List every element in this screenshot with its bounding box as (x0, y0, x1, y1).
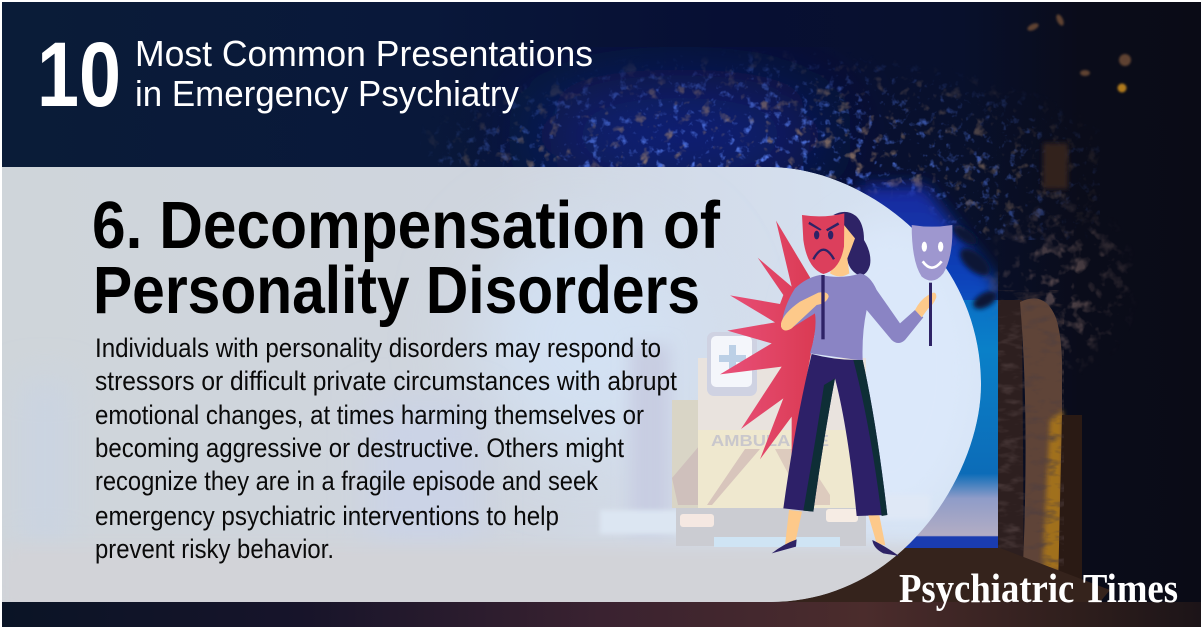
legs (785, 510, 885, 545)
body text: stressors or difficult private circumstances with abrupt (95, 366, 678, 396)
body text: recognize they are in a fragile episode and seek (95, 466, 599, 496)
body text (95, 333, 678, 564)
body text: becoming aggressive or destructive. Others might (95, 433, 625, 463)
ambulance lettering: AMBULANCE (711, 433, 829, 450)
distant leaves catching light (1026, 13, 1131, 93)
title: line one: Most Common Presentations (135, 33, 593, 74)
title: line two: in Emergency Psychiatry (135, 73, 520, 114)
title: number 10: 10 (37, 24, 121, 126)
trouser shading (803, 360, 887, 516)
heading: decompensation of personality disorders: 6. Decompensation of (92, 188, 721, 263)
mask stick: angry (821, 275, 825, 339)
icon: smiling purple mask (912, 225, 952, 281)
arm: near forearm (781, 292, 829, 330)
body text: prevent risky behavior. (95, 534, 334, 564)
trousers (783, 354, 887, 516)
hand with smile mask (915, 293, 936, 317)
heading: decompensation of personality disorders: Personality Disorders (93, 253, 700, 328)
icon: red starburst (720, 221, 817, 459)
mask stick: smile (929, 283, 932, 346)
body text: emergency psychiatric interventions to help (95, 501, 559, 531)
illustration: woman holding two masks (720, 212, 952, 556)
heading: decompensation of personality disorders (92, 188, 721, 328)
hair (833, 212, 870, 275)
shirt (782, 273, 923, 361)
panel: translucent content area (2, 167, 982, 615)
icon: angry red mask (802, 213, 844, 274)
shoes (772, 539, 899, 556)
body text: Individuals with personality disorders may respond to (95, 333, 661, 363)
ambulance (672, 332, 866, 547)
body text: emotional changes, at times harming themselves or (95, 400, 644, 430)
face and neck (830, 225, 855, 276)
